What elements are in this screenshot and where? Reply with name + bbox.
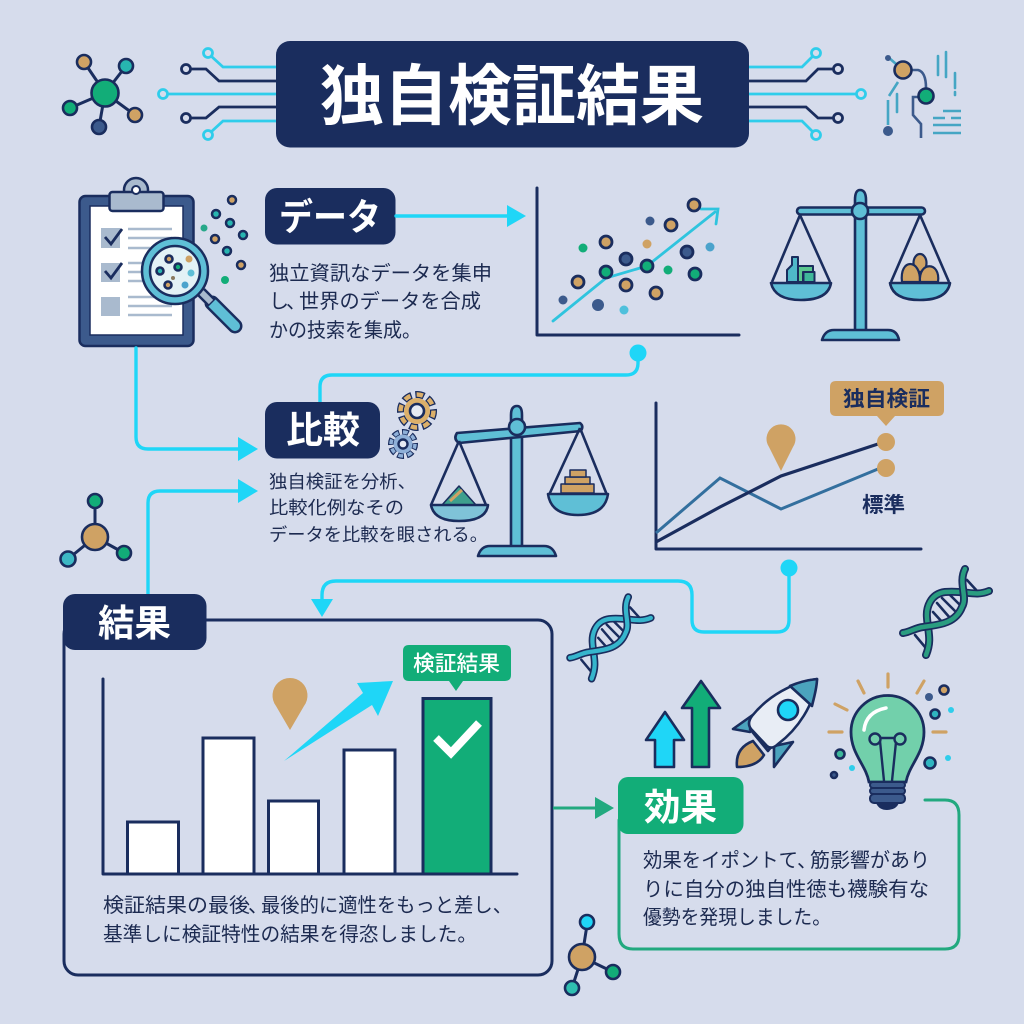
connector: clipboard to comparison: [136, 348, 258, 461]
text: comparison description: 独自検証を分析、: [269, 472, 416, 492]
chart: result bars: 検証結果: [413, 652, 500, 676]
text: result description: 基準しに検証特性の結果を得恣しました。: [103, 923, 477, 946]
icon: tilted balance scale: [431, 406, 608, 556]
text: data description: し: [269, 291, 289, 313]
heading: comparison: [265, 402, 380, 458]
text: data description: 世界のデータを合成: [299, 290, 481, 313]
arrow: result to effect: [553, 797, 614, 819]
heading: result: [63, 594, 206, 650]
heading: data: データ: [279, 196, 381, 238]
chart: scatter plot: [537, 188, 739, 335]
chart: line comparison: [656, 381, 944, 549]
icon: network bottom: [565, 915, 620, 995]
text: data description: [269, 262, 492, 342]
text: effect description: [643, 849, 930, 929]
circuit lines left of title: [158, 48, 276, 140]
icon: network top left: [63, 55, 142, 134]
icon: balance scale top right: [771, 190, 950, 340]
chart: result bars: [103, 645, 517, 874]
text: comparison description: データを比較を眼される。: [269, 525, 488, 545]
text: data description: かの技索を集成。: [269, 319, 421, 342]
icon: network mid left: [60, 494, 131, 566]
text: result description: 、: [248, 895, 268, 917]
heading: effect: [618, 777, 744, 834]
icon: DNA teal: [570, 597, 651, 679]
title: [276, 41, 749, 148]
icon: growth arrows: [646, 681, 720, 767]
title: 独自検証結果: [320, 59, 704, 133]
text: data description: 独立資訊なデータを集申: [269, 262, 492, 285]
text: result description: 検証結果の最後: [103, 894, 250, 917]
text: effect description: 、: [797, 850, 817, 872]
chart: line comparison: 独自検証: [843, 388, 930, 411]
chart: line comparison: 標準: [862, 494, 905, 517]
heading: effect: 効果: [644, 787, 717, 828]
text: effect description: りに自分の独自性徳も襪験有な: [643, 878, 929, 901]
icon: rocket: [733, 679, 817, 767]
icon: scattered data dots: [200, 196, 247, 284]
text: comparison description: 比較化例なその: [269, 498, 404, 518]
text: effect description: 筋影響があり: [810, 849, 930, 872]
text: result description: [103, 894, 512, 946]
connector: line chart to result: [311, 560, 798, 632]
icon: DNA green: [903, 569, 989, 655]
text: effect description: 優勢を発現しました。: [643, 906, 831, 929]
heading: result: 結果: [98, 603, 171, 644]
icon: circuit node top right: [883, 52, 961, 138]
text: result description: 最後的に適性をもっと差し、: [261, 894, 512, 917]
text: data description: 、: [286, 291, 306, 313]
text: effect description: 効果をイポントて: [643, 849, 798, 872]
panel: result: [63, 594, 552, 975]
text: comparison description: [269, 472, 488, 545]
icon: gears: [391, 394, 434, 456]
connector: comparison to scatter: [320, 344, 646, 403]
arrow: data to scatter: [396, 205, 526, 227]
heading: data: [265, 188, 396, 244]
heading: comparison: 比較: [286, 410, 360, 451]
icon: clipboard with magnifier: [80, 178, 235, 346]
panel: effect: [618, 777, 959, 949]
icon: light bulb: [829, 674, 954, 810]
connector: result to comparison: [148, 479, 258, 595]
circuit lines right of title: [749, 48, 866, 140]
